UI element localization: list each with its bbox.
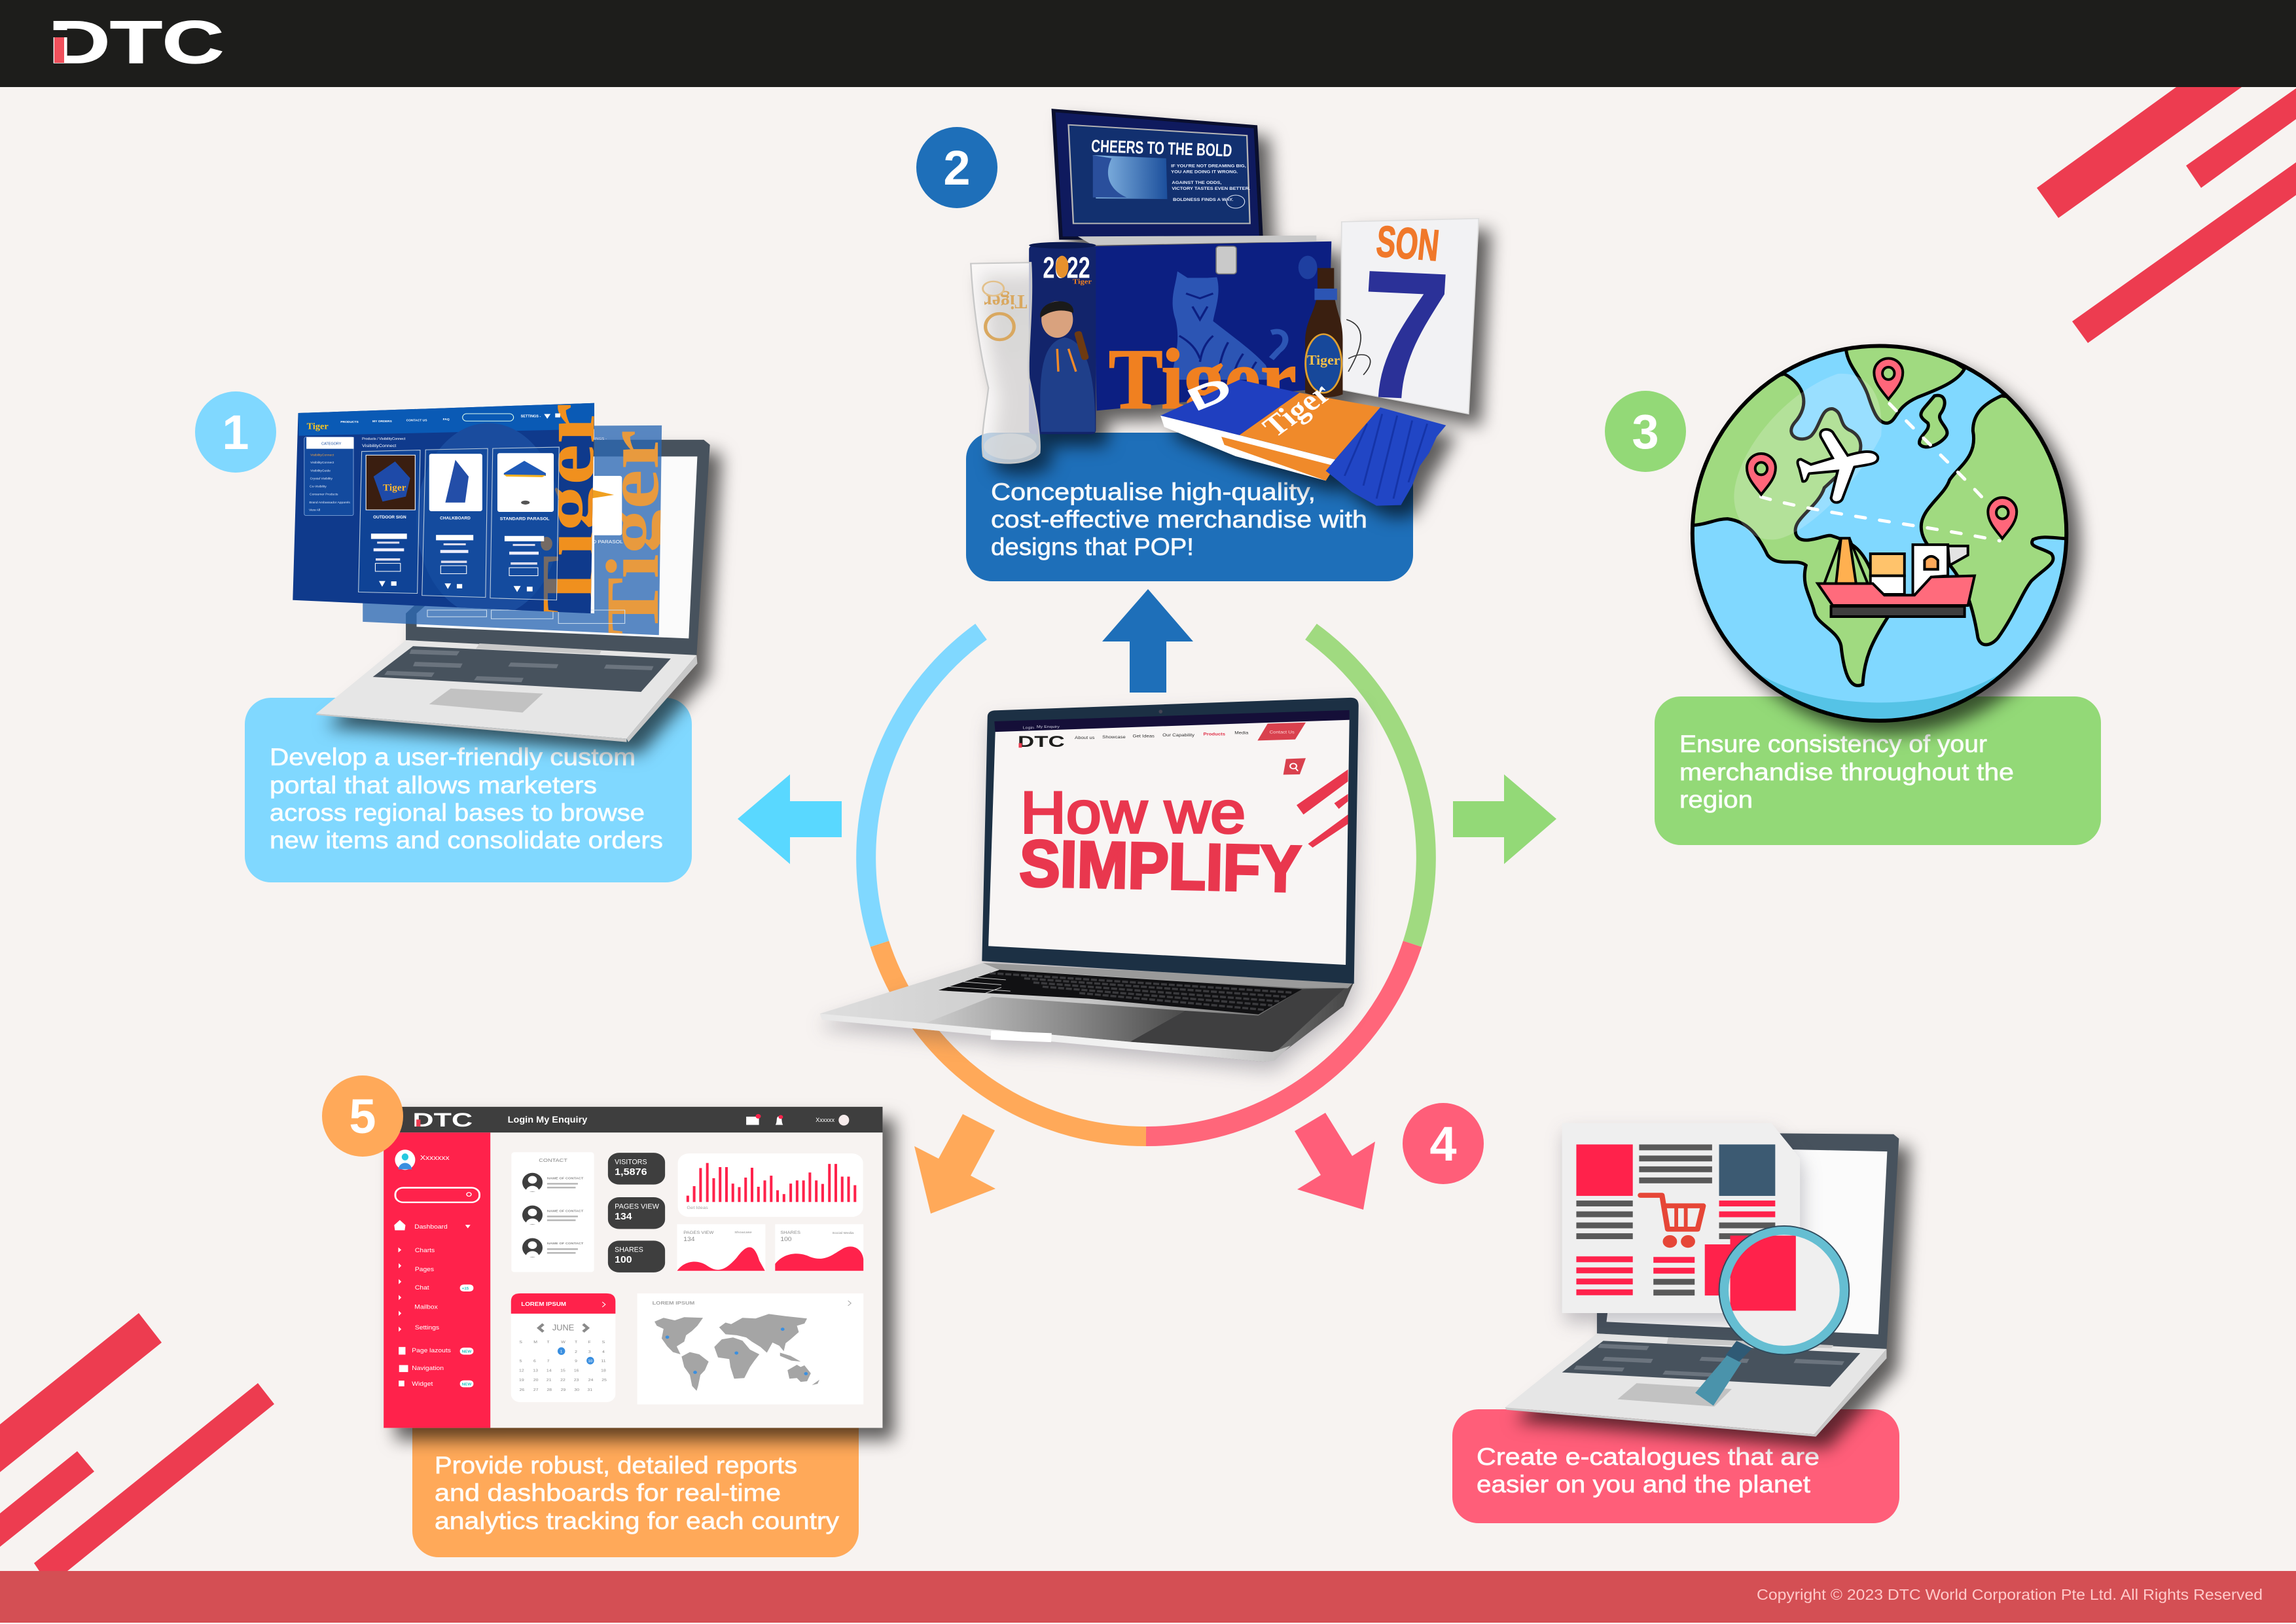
calendar card: 13 xyxy=(533,1369,538,1373)
cooler lid: YOU ARE DOING IT WRONG. xyxy=(1171,170,1238,174)
badge 5 xyxy=(322,1075,403,1157)
calendar card: LOREM IPSUM xyxy=(521,1301,566,1307)
contact card: CONTACT xyxy=(539,1157,567,1163)
DTC logo: DTC xyxy=(48,9,224,76)
world map card xyxy=(637,1293,863,1405)
calendar card: 26 xyxy=(520,1388,525,1392)
keyboard xyxy=(937,969,1302,1015)
location pin top xyxy=(1874,358,1903,399)
calendar card: W xyxy=(561,1340,565,1344)
beer glass: Tiger xyxy=(984,290,1027,313)
calendar card: 5 xyxy=(520,1360,522,1363)
panel 3 text xyxy=(1679,731,2014,813)
dashboard sidebar: Xxxxxxx xyxy=(420,1155,450,1162)
calendar card: 10 xyxy=(588,1360,593,1363)
bar chart card: Get Ideas xyxy=(687,1206,708,1210)
dashboard sidebar: Mailbox xyxy=(414,1304,438,1310)
product card chalkboard: CHALKBOARD xyxy=(440,516,471,520)
mini logo: DTC xyxy=(1018,733,1065,750)
product card outdoor sign: Tiger xyxy=(383,483,406,493)
badge 2: 2 xyxy=(943,141,971,195)
panel 2 text box xyxy=(966,433,1413,581)
calendar card: 30 xyxy=(574,1388,580,1392)
calendar card: 6 xyxy=(533,1360,536,1363)
site navigation: Showcase xyxy=(1102,735,1126,740)
portal navigation: SETTINGS - xyxy=(521,415,541,419)
headline on screen: How we xyxy=(1020,780,1246,846)
dashboard sidebar: +15 xyxy=(462,1287,469,1291)
badge 4: 4 xyxy=(1429,1117,1457,1171)
stat: pages view: PAGES VIEW xyxy=(615,1202,659,1210)
portal category menu: Brand Ambassador Apparels xyxy=(310,501,351,505)
dashboard sidebar: NEW xyxy=(462,1383,472,1386)
site navigation: Our Capability xyxy=(1162,734,1194,738)
airplane xyxy=(1798,429,1878,503)
portal category menu: View All xyxy=(309,509,320,512)
calendar card: 20 xyxy=(533,1379,539,1382)
bar chart card xyxy=(678,1153,863,1217)
stat: pages view: 134 xyxy=(615,1212,632,1222)
calendar card: T xyxy=(547,1340,550,1344)
site navigation xyxy=(1075,731,1248,740)
footer bar xyxy=(0,1571,2296,1623)
portal navigation: MY ORDERS xyxy=(372,420,392,424)
portal logo: Tiger xyxy=(307,422,329,431)
front portal layer: VisibilityConnect xyxy=(362,444,396,448)
dashboard sidebar: Dashboard xyxy=(414,1224,448,1231)
arrow down-right xyxy=(1295,1113,1375,1210)
calendar card: 18 xyxy=(601,1369,606,1373)
cooler lid: VICTORY TASTES EVEN BETTER. xyxy=(1172,187,1250,191)
panel 4 text: easier on you and the planet xyxy=(1477,1471,1811,1498)
laptop screen xyxy=(982,698,1359,984)
cooler lid xyxy=(1054,111,1316,245)
laptop mockup xyxy=(1505,1133,1899,1437)
product card standard parasol xyxy=(490,447,559,600)
illustration 5: dashboard xyxy=(384,1107,882,1428)
laptop screen: My Enquiry xyxy=(1037,725,1060,729)
calendar card: 19 xyxy=(519,1379,524,1382)
calendar card: 25 xyxy=(601,1379,607,1382)
panel 5 text xyxy=(435,1452,840,1534)
gift tube: 2022 xyxy=(1043,251,1090,285)
area chart: shares xyxy=(775,1224,863,1272)
area chart: pages view: 134 xyxy=(683,1236,695,1243)
center laptop xyxy=(820,698,1359,1062)
site navigation: Get Ideas xyxy=(1132,734,1155,739)
dashboard header: Xxxxxx xyxy=(816,1117,834,1124)
illustration 2: merchandise xyxy=(971,111,1479,506)
product card outdoor sign xyxy=(359,450,420,594)
catalogue sheet xyxy=(1562,1123,1800,1313)
badge 1 xyxy=(195,391,276,473)
cooler lid: AGAINST THE ODDS, xyxy=(1172,181,1222,185)
panel 3 text: merchandise throughout the xyxy=(1679,759,2014,785)
dashboard sidebar: Widget xyxy=(412,1381,433,1388)
dashboard sidebar: Charts xyxy=(415,1248,435,1254)
illustration 3: globe xyxy=(1668,338,2085,731)
product card chalkboard xyxy=(422,448,488,598)
panel 1 text: across regional bases to browse xyxy=(270,799,645,826)
dashboard sidebar: NEW xyxy=(462,1350,472,1354)
calendar card: 3 xyxy=(588,1350,591,1354)
gift tube: Tiger xyxy=(1073,277,1092,285)
location pin left xyxy=(1747,454,1776,494)
calendar card: S xyxy=(602,1340,605,1344)
panel 5 text: Provide robust, detailed reports xyxy=(435,1452,797,1479)
panel 3 text: Ensure consistency of your xyxy=(1679,731,1987,757)
central ring xyxy=(866,632,1426,1136)
portal navigation xyxy=(340,415,541,424)
portal navigation: FAQ xyxy=(443,418,450,422)
illustration 4: e-catalogue laptop xyxy=(1505,1123,1899,1437)
stat: visitors: VISITORS xyxy=(615,1158,647,1166)
scarf: D xyxy=(1181,369,1239,419)
area chart: pages view: Showcase xyxy=(734,1231,752,1235)
cooler lid: CHEERS TO THE BOLD xyxy=(1091,137,1232,161)
calendar card: 14 xyxy=(547,1369,552,1373)
back portal layer: INGS - xyxy=(595,437,607,441)
illustration 1: laptop with portal xyxy=(293,403,710,742)
dashboard sidebar: Chat xyxy=(415,1285,429,1291)
cargo ship xyxy=(1818,538,1975,617)
cooler lid: BOLDNESS FINDS A WAY. xyxy=(1173,198,1233,202)
area chart: pages view xyxy=(677,1224,765,1272)
continents xyxy=(1695,348,2064,687)
search icon box xyxy=(1283,758,1306,775)
calendar card: JUNE xyxy=(552,1323,574,1332)
back portal layer xyxy=(363,425,675,637)
calendar card: 4 xyxy=(602,1350,605,1354)
front portal layer: Tiger xyxy=(526,403,611,617)
mini top links: Login xyxy=(1023,726,1034,730)
decorative stripes top right xyxy=(2037,87,2296,343)
calendar card: 16 xyxy=(574,1369,579,1373)
dashboard sidebar xyxy=(384,1132,490,1428)
portal category menu xyxy=(304,437,354,516)
decorative stripes bottom left xyxy=(0,1313,274,1571)
stat: shares: 100 xyxy=(615,1255,632,1265)
badge 5: 5 xyxy=(349,1089,376,1144)
cooler body xyxy=(1094,242,1331,427)
portal category menu: VisibilityConnect xyxy=(310,461,334,465)
jersey in bag: 7 xyxy=(1353,231,1455,439)
area chart: pages view: PAGES VIEW xyxy=(683,1231,714,1235)
panel 2 text: Conceptualise high-quality, xyxy=(991,478,1316,505)
portal category menu: Co-Visibility xyxy=(310,484,327,488)
stat: shares xyxy=(608,1240,665,1272)
portal category menu: VisibilityGuide xyxy=(310,469,331,473)
beer bottle: Tiger xyxy=(1307,352,1340,367)
headline on screen xyxy=(1019,780,1302,906)
product card standard parasol: STANDARD PARASOL xyxy=(500,516,549,521)
panel 1 text: Develop a user-friendly custom xyxy=(270,744,636,770)
site navigation: Media xyxy=(1234,731,1248,735)
badge 3 xyxy=(1605,391,1686,472)
gift tube xyxy=(1029,242,1096,434)
stat: pages view xyxy=(608,1197,665,1229)
panel 4 text box xyxy=(1452,1409,1899,1523)
dashboard header: Login My Enquiry xyxy=(508,1115,588,1125)
location pin right xyxy=(1988,497,2017,539)
portal category menu: Crystal Visibility xyxy=(310,477,333,480)
scarf: Tiger xyxy=(1256,377,1338,443)
panel 2 text xyxy=(991,478,1367,560)
dashboard sidebar: Settings xyxy=(415,1325,439,1331)
area chart: shares: Social Media xyxy=(833,1231,853,1235)
stat: visitors xyxy=(608,1153,665,1185)
laptop mockup xyxy=(316,440,710,742)
globe sphere xyxy=(1668,338,2085,731)
back portal layer: D PARASOL xyxy=(592,539,623,545)
arrow right xyxy=(1453,774,1556,864)
area chart: shares: SHARES xyxy=(780,1231,800,1235)
headline on screen: SIMPLIFY xyxy=(1019,827,1302,906)
laptop base xyxy=(820,963,1354,1062)
front portal layer: Products / VisibilityConnect xyxy=(362,437,406,441)
portal category menu: Consumer Products xyxy=(310,493,338,496)
back portal layer: Tiger xyxy=(592,430,675,637)
portal navigation: CONTACT US xyxy=(406,418,427,422)
cooler body: Tiger xyxy=(1109,331,1297,427)
calendar card: 2 xyxy=(575,1350,577,1354)
panel 5 text: and dashboards for real-time xyxy=(435,1479,781,1506)
calendar card: 1 xyxy=(560,1350,562,1354)
contact card: NAME OF CONTACT xyxy=(547,1177,584,1180)
arrow left xyxy=(738,774,842,864)
contact card: NAME OF CONTACT xyxy=(547,1242,584,1246)
contact card xyxy=(511,1152,594,1272)
stat: visitors: 1,5876 xyxy=(615,1167,647,1178)
beer glass xyxy=(971,262,1040,463)
scarf xyxy=(1160,369,1446,506)
world map card: LOREM IPSUM xyxy=(653,1300,694,1306)
calendar card: 12 xyxy=(519,1369,524,1373)
calendar card: 15 xyxy=(560,1369,565,1373)
calendar card: 11 xyxy=(601,1360,606,1363)
site navigation: About us xyxy=(1075,736,1095,740)
calendar card: 28 xyxy=(547,1388,552,1392)
contact button: Contact Us xyxy=(1270,731,1295,734)
dashboard header: DTC xyxy=(412,1109,473,1130)
portal navigation: PRODUCTS xyxy=(340,420,359,424)
dashboard sidebar: Pages xyxy=(415,1267,434,1273)
front portal layer xyxy=(293,403,611,617)
calendar card: S xyxy=(519,1340,522,1344)
contact button xyxy=(1257,723,1306,740)
panel 4 text xyxy=(1477,1443,1820,1498)
badge 3: 3 xyxy=(1632,405,1659,459)
product card outdoor sign: OUTDOOR SIGN xyxy=(373,515,406,520)
calendar card: T xyxy=(575,1340,577,1344)
dashboard header xyxy=(384,1107,882,1132)
dashboard sidebar: Page lazouts xyxy=(412,1348,451,1354)
screen stripes xyxy=(1297,770,1348,848)
panel 3 text box xyxy=(1655,696,2101,845)
calendar card: F xyxy=(588,1340,591,1344)
contact card: NAME OF CONTACT xyxy=(547,1210,584,1213)
jersey in bag: SON xyxy=(1374,217,1441,270)
portal category menu: VisibilityConnect xyxy=(310,453,334,457)
panel 1 text xyxy=(270,744,663,854)
dashboard sidebar: Navigation xyxy=(412,1365,444,1372)
calendar card: 31 xyxy=(587,1388,593,1392)
panel 3 text: region xyxy=(1679,786,1753,813)
calendar card xyxy=(511,1293,615,1402)
calendar card: 27 xyxy=(533,1388,539,1392)
badge 4 xyxy=(1403,1103,1484,1184)
badge 2 xyxy=(916,127,997,208)
calendar card: 29 xyxy=(561,1388,566,1392)
arrow down-left xyxy=(914,1114,996,1214)
panel 2 text: designs that POP! xyxy=(991,533,1194,560)
shopping cart icon xyxy=(1640,1195,1703,1245)
header bar xyxy=(0,0,2296,87)
copyright: Copyright © 2023 DTC World Corporation Pte Ltd. All Rights Reserved xyxy=(1757,1586,2263,1603)
magnifying glass xyxy=(1695,1226,1849,1405)
calendar card: M xyxy=(533,1340,537,1344)
calendar card: 9 xyxy=(575,1360,577,1363)
area chart: shares: 100 xyxy=(780,1236,792,1243)
badge 1: 1 xyxy=(222,405,249,460)
panel 1 text: portal that allows marketers xyxy=(270,772,597,799)
stat: shares: SHARES xyxy=(615,1245,643,1254)
calendar card: 21 xyxy=(547,1379,552,1382)
site navigation: Products xyxy=(1204,732,1225,736)
panel 4 text: Create e-catalogues that are xyxy=(1477,1443,1820,1470)
panel 5 text: analytics tracking for each country xyxy=(435,1507,840,1534)
calendar card: 22 xyxy=(560,1379,565,1382)
calendar card: 7 xyxy=(547,1360,550,1363)
panel 5 text box xyxy=(412,1401,859,1557)
panel 2 text: cost-effective merchandise with xyxy=(991,506,1367,533)
panel 1 text: new items and consolidate orders xyxy=(270,827,663,854)
beer bottle xyxy=(1305,268,1342,397)
calendar card: 24 xyxy=(588,1379,594,1382)
cooler lid: IF YOU'RE NOT DREAMING BIG, xyxy=(1171,164,1246,168)
dashed routes xyxy=(1761,404,2000,541)
portal category menu: CATEGORY xyxy=(321,442,342,446)
panel 1 text box xyxy=(245,698,692,882)
arrow up xyxy=(1102,589,1193,693)
calendar card: 23 xyxy=(574,1379,579,1382)
